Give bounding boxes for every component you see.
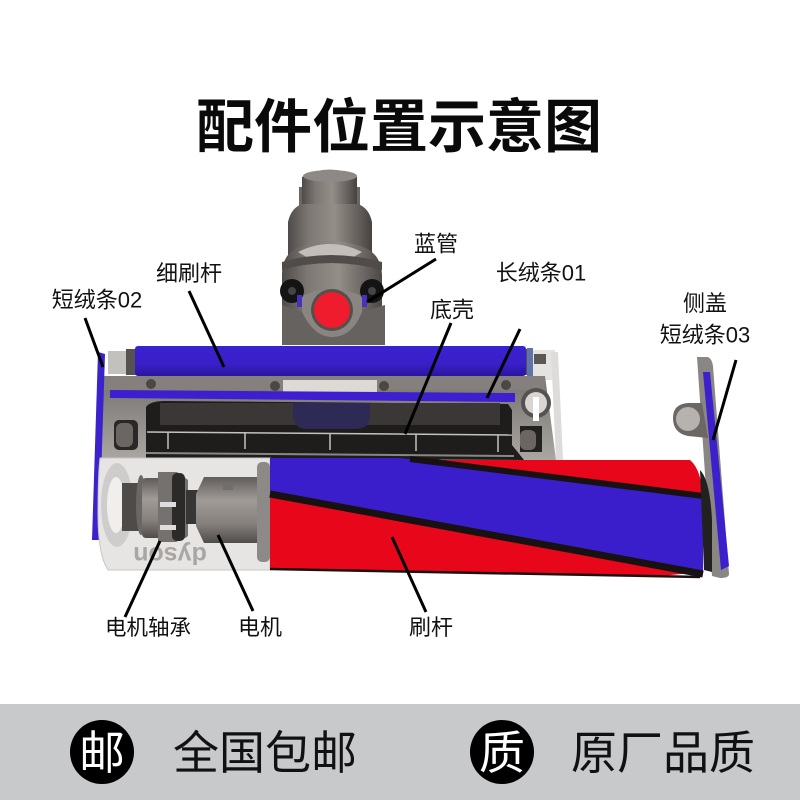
label: 细刷杆 — [156, 261, 224, 367]
long velvet strip 01 — [110, 390, 515, 402]
right wheel — [520, 426, 542, 452]
label: 短绒条03: 短绒条03 — [660, 322, 750, 348]
main brush bar — [270, 458, 703, 577]
keyhole — [521, 388, 551, 418]
label: 侧盖: 侧盖 — [683, 291, 727, 316]
short velvet strip 02 — [92, 352, 105, 540]
badge: 质: 质 — [479, 727, 525, 779]
left wheel — [114, 420, 138, 450]
base plate — [100, 352, 563, 460]
motor bearing — [122, 472, 188, 542]
badge: 邮: 邮 — [79, 727, 125, 779]
label: 刷杆: 刷杆 — [409, 615, 453, 640]
label: 电机轴承 — [105, 541, 191, 640]
bottom bar — [0, 704, 800, 800]
suction opening — [146, 401, 524, 460]
label: 蓝管: 蓝管 — [414, 232, 458, 256]
label: 电机 — [218, 535, 282, 640]
label: 短绒条03 — [660, 322, 750, 440]
label: 底壳 — [405, 298, 474, 434]
housing logo text: dyson — [133, 541, 207, 569]
side cover — [673, 357, 729, 578]
label: 短绒条02 — [52, 288, 142, 367]
label: 电机: 电机 — [238, 615, 282, 640]
label: 长绒条01 — [487, 260, 586, 398]
label: 蓝管 — [367, 232, 458, 302]
text: 原厂品质: 原厂品质 — [571, 727, 755, 779]
red button — [311, 289, 353, 331]
badge: 邮 — [70, 720, 134, 784]
label: 短绒条02: 短绒条02 — [52, 288, 142, 312]
clear housing — [98, 458, 270, 570]
motor — [186, 462, 270, 562]
badge: 质 — [470, 720, 534, 784]
label: 细刷杆: 细刷杆 — [156, 261, 222, 286]
title: 配件位置示意图 — [196, 95, 602, 160]
label: 电机轴承: 电机轴承 — [105, 616, 191, 640]
label: 刷杆 — [392, 537, 453, 640]
side screw right — [360, 279, 384, 303]
neck connector — [280, 170, 385, 345]
label: 长绒条01: 长绒条01 — [496, 260, 586, 286]
label: 底壳: 底壳 — [430, 298, 474, 322]
illustration: cleaner head — [92, 170, 729, 578]
clear end strip — [551, 352, 563, 460]
text: 全国包邮: 全国包邮 — [173, 727, 357, 779]
front roller — [108, 346, 555, 380]
side screw left — [280, 279, 304, 303]
